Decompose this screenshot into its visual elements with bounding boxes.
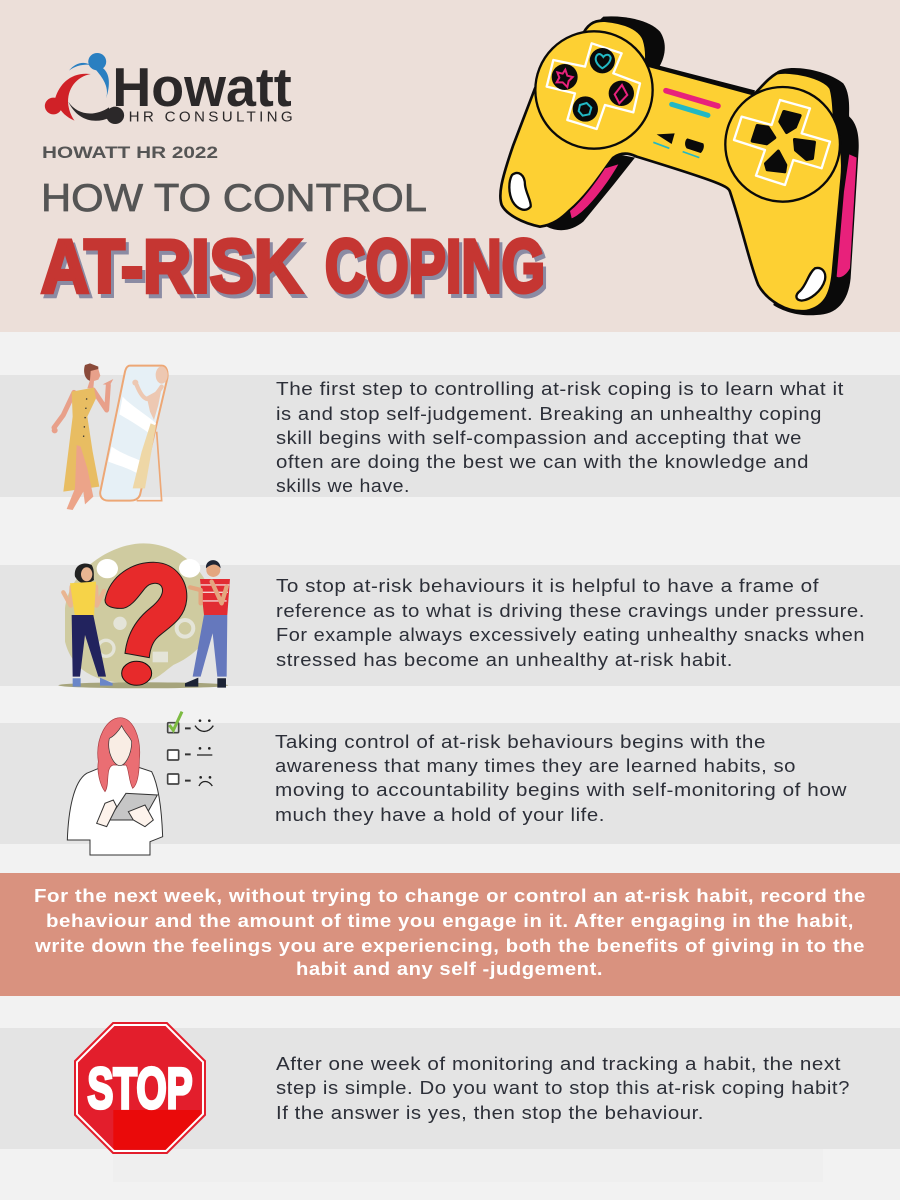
text: step 4 <box>276 1053 850 1123</box>
panel: faint footer block <box>113 1149 823 1182</box>
icon: question mark and two people <box>58 543 230 688</box>
callout: weekly exercise banner: For the next week, without trying to change or control an at-risk habit, record the <box>34 885 866 906</box>
text: step 1: The first step to controlling at-risk coping is to learn what it <box>276 378 844 399</box>
panel: step 2 band <box>0 543 900 688</box>
text: Howatt HR 2022: HOWATT HR 2022 <box>42 144 218 162</box>
panel: step 4 band <box>0 1022 900 1154</box>
icon: game controller <box>500 16 859 315</box>
heading: At-risk coping <box>41 224 548 312</box>
text: step 3: awareness that many times they are learned habits, so <box>275 755 796 776</box>
panel: header <box>0 0 900 332</box>
text: step 1: often are doing the best we can with the knowledge and <box>276 451 809 472</box>
callout: weekly exercise banner <box>0 873 900 996</box>
panel: step 3 band <box>0 712 900 855</box>
heading: At-risk coping: AT-RISK <box>44 228 305 312</box>
text: step 1 <box>276 378 844 496</box>
heading: How to control: HOW TO CONTROL <box>41 177 427 220</box>
panel: step 1 band <box>0 363 900 510</box>
icon: stop sign <box>74 1022 206 1154</box>
text: step 1: skills we have. <box>276 475 410 496</box>
icon: stop sign: STOP <box>87 1057 193 1121</box>
text: step 4: If the answer is yes, then stop the behaviour. <box>276 1102 704 1123</box>
callout: weekly exercise banner: write down the feelings you are experiencing, both the benefits of giving in to the <box>34 935 865 956</box>
text: step 3 <box>275 731 847 825</box>
heading: At-risk coping: COPING <box>328 228 548 312</box>
callout: weekly exercise banner: habit and any self -judgement. <box>296 958 603 979</box>
text: step 2: For example always excessively eating unhealthy snacks when <box>276 624 865 645</box>
text: step 2 <box>276 575 865 670</box>
text: step 1: skill begins with self-compassion and accepting that we <box>276 427 802 448</box>
heading: At-risk coping: COPING <box>325 224 545 308</box>
text: step 4: step is simple. Do you want to stop this at-risk coping habit? <box>276 1077 850 1098</box>
text: step 3: Taking control of at-risk behaviours begins with the <box>275 731 766 752</box>
logo: Howatt HR Consulting: HR CONSULTING <box>129 109 293 125</box>
callout: weekly exercise banner: behaviour and the amount of time you engage in it. After engaging in the habit, <box>46 910 854 931</box>
text: step 2: To stop at-risk behaviours it is helpful to have a frame of <box>276 575 819 596</box>
logo: Howatt HR Consulting: Howatt <box>112 56 292 118</box>
icon: woman at mirror <box>52 363 168 510</box>
text: step 2: stressed has become an unhealthy at-risk habit. <box>276 649 733 670</box>
text: step 3: much they have a hold of your life. <box>275 804 605 825</box>
text: step 2: reference as to what is driving these cravings under pressure. <box>276 600 865 621</box>
text: step 1: is and stop self-judgement. Breaking an unhealthy coping <box>276 403 822 424</box>
text: step 3: moving to accountability begins with self-monitoring of how <box>275 779 847 800</box>
text: step 4: After one week of monitoring and tracking a habit, the next <box>276 1053 841 1074</box>
heading: At-risk coping: AT-RISK <box>41 224 302 308</box>
icon: woman with tablet and mood checklist <box>67 712 213 855</box>
logo: Howatt HR Consulting <box>45 53 293 125</box>
